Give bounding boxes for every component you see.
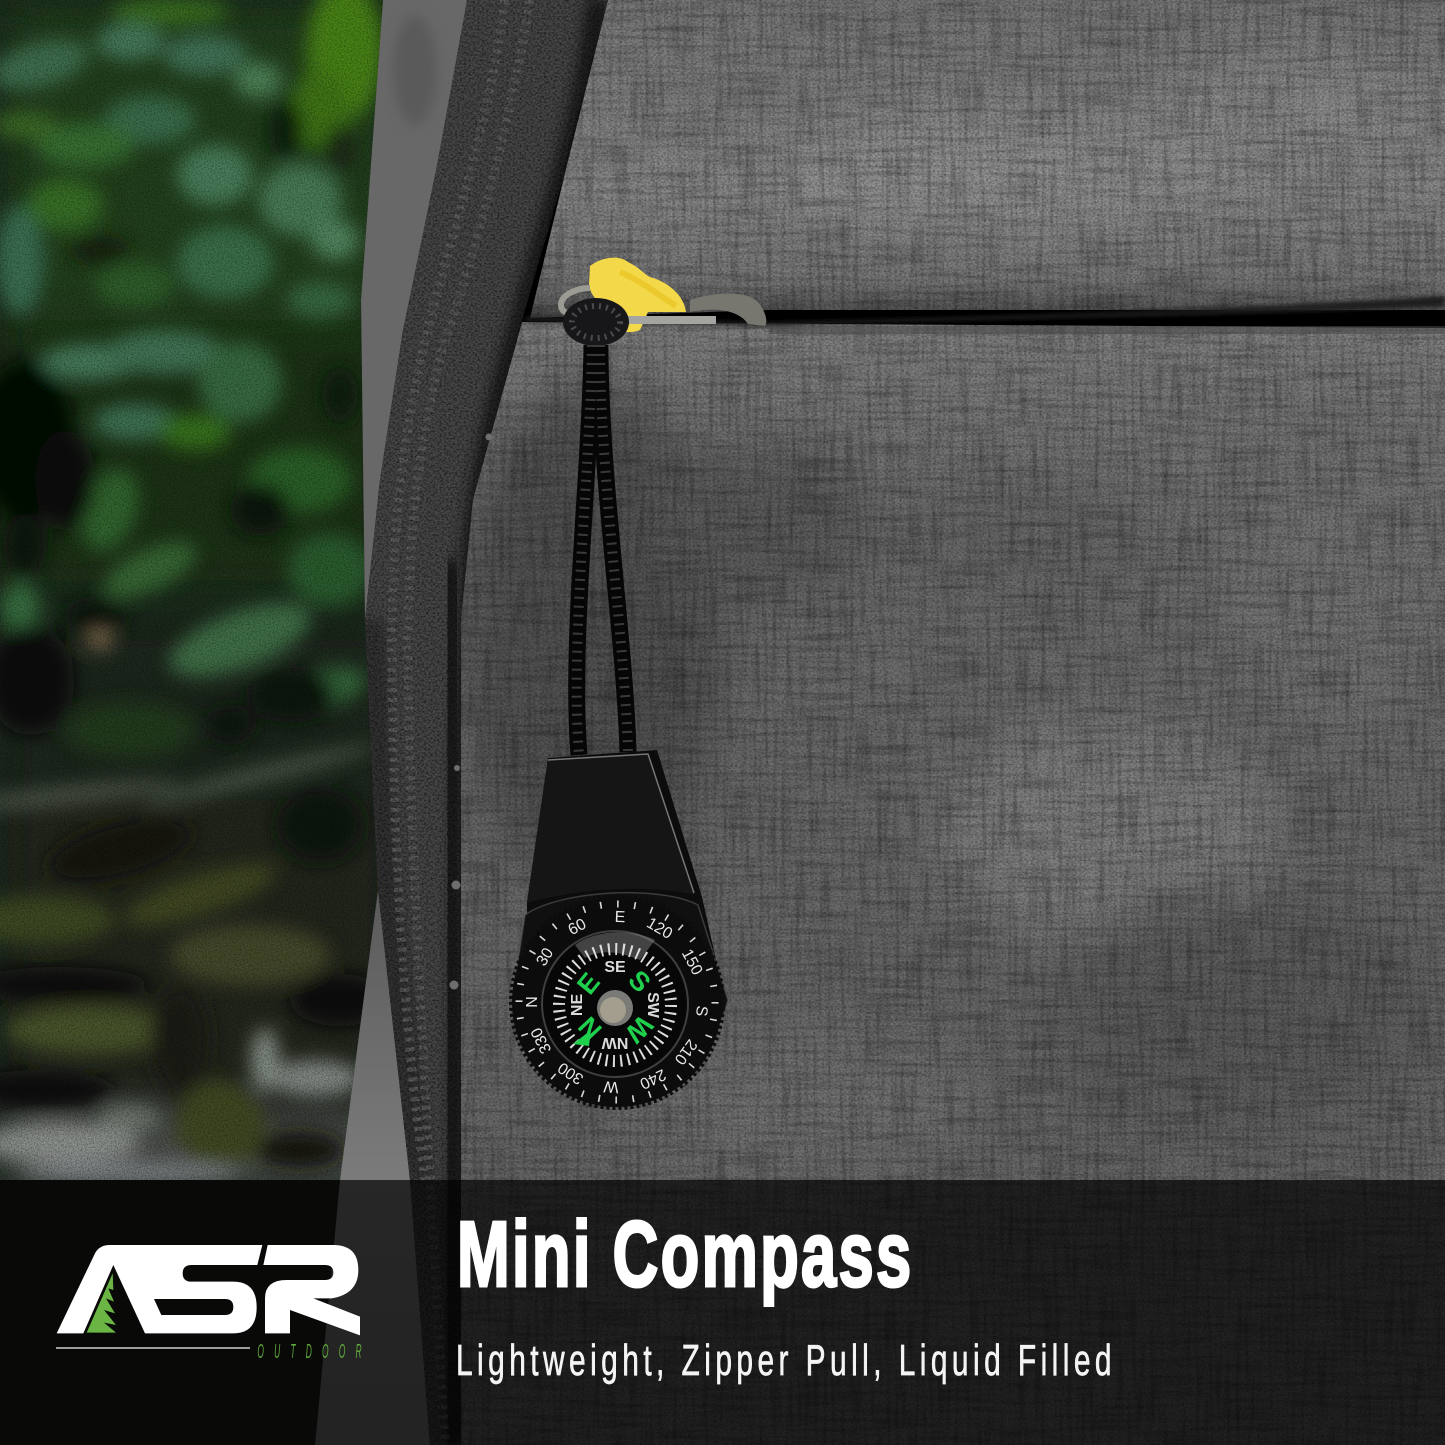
logo underline — [56, 1347, 250, 1349]
north arrow — [573, 1030, 591, 1046]
bezel degree labels: 300 — [555, 1058, 587, 1087]
bezel degree labels: 150 — [678, 947, 705, 978]
caption bar — [0, 1180, 1445, 1445]
logo letter R — [263, 1245, 360, 1335]
zipper webbing band — [360, 0, 620, 1445]
bezel degree labels: 30 — [533, 945, 557, 969]
icon: braided cord loop — [577, 345, 628, 755]
bezel degree labels: W — [602, 1077, 619, 1095]
liquid capsule — [542, 931, 688, 1077]
stitched beads on seam — [450, 434, 492, 990]
bezel degree labels: 60 — [565, 916, 589, 939]
card intercardinal letters: NW — [601, 1034, 628, 1051]
icon: yellow zipper puller with metal ring — [561, 258, 766, 332]
bezel knurled edge — [511, 896, 723, 1108]
upper pocket fabric — [530, 0, 1445, 318]
card cardinal letters: S — [622, 964, 657, 998]
card cardinal letters — [571, 964, 659, 1049]
subheading: features: Lightweight, Zipper Pull, Liquid Filled — [456, 1335, 1112, 1384]
compass bezel — [512, 897, 722, 1107]
logo pine tree — [87, 1273, 116, 1333]
card intercardinal letters: SE — [604, 959, 626, 976]
logo tagline: OUTDOOR — [257, 1341, 362, 1363]
logo: ASR Outdoor — [56, 1245, 362, 1363]
logo letters A and S — [57, 1245, 262, 1333]
icon: braided cord knot — [563, 298, 629, 346]
bezel degree labels: 210 — [671, 1036, 700, 1068]
bezel degree labels: N — [524, 996, 541, 1008]
bezel tick marks — [519, 904, 715, 1100]
capsule highlight — [575, 932, 655, 960]
bezel degree labels — [524, 909, 710, 1095]
card cardinal letters: E — [571, 967, 606, 1000]
card cardinal letters: N — [573, 1011, 608, 1046]
photo background: blurred forest foliage — [0, 0, 400, 1445]
icon: compass zipper pull tab — [527, 750, 725, 1000]
bag side panel: light grey fabric strip — [315, 0, 480, 1445]
zipper seam shadow — [525, 296, 1445, 334]
icon: mini compass — [511, 893, 728, 1108]
card intercardinal letters — [569, 959, 661, 1051]
bezel degree labels: 240 — [637, 1065, 668, 1092]
lower pocket fabric — [461, 322, 1445, 1445]
bezel degree labels: S — [692, 1005, 710, 1017]
bezel degree labels: 120 — [643, 915, 675, 943]
fabric weave texture — [450, 0, 1445, 1445]
card intercardinal letters: NE — [569, 994, 586, 1016]
bezel degree labels: 330 — [528, 1025, 555, 1056]
bezel degree labels: E — [614, 909, 626, 926]
card intercardinal letters: SW — [644, 992, 661, 1019]
card cardinal letters: W — [619, 1009, 659, 1049]
card tick marks — [559, 949, 671, 1061]
compass body rim — [512, 893, 728, 1085]
heading: Mini Compass: Mini Compass — [457, 1202, 911, 1306]
centre pivot pin — [597, 990, 633, 1026]
